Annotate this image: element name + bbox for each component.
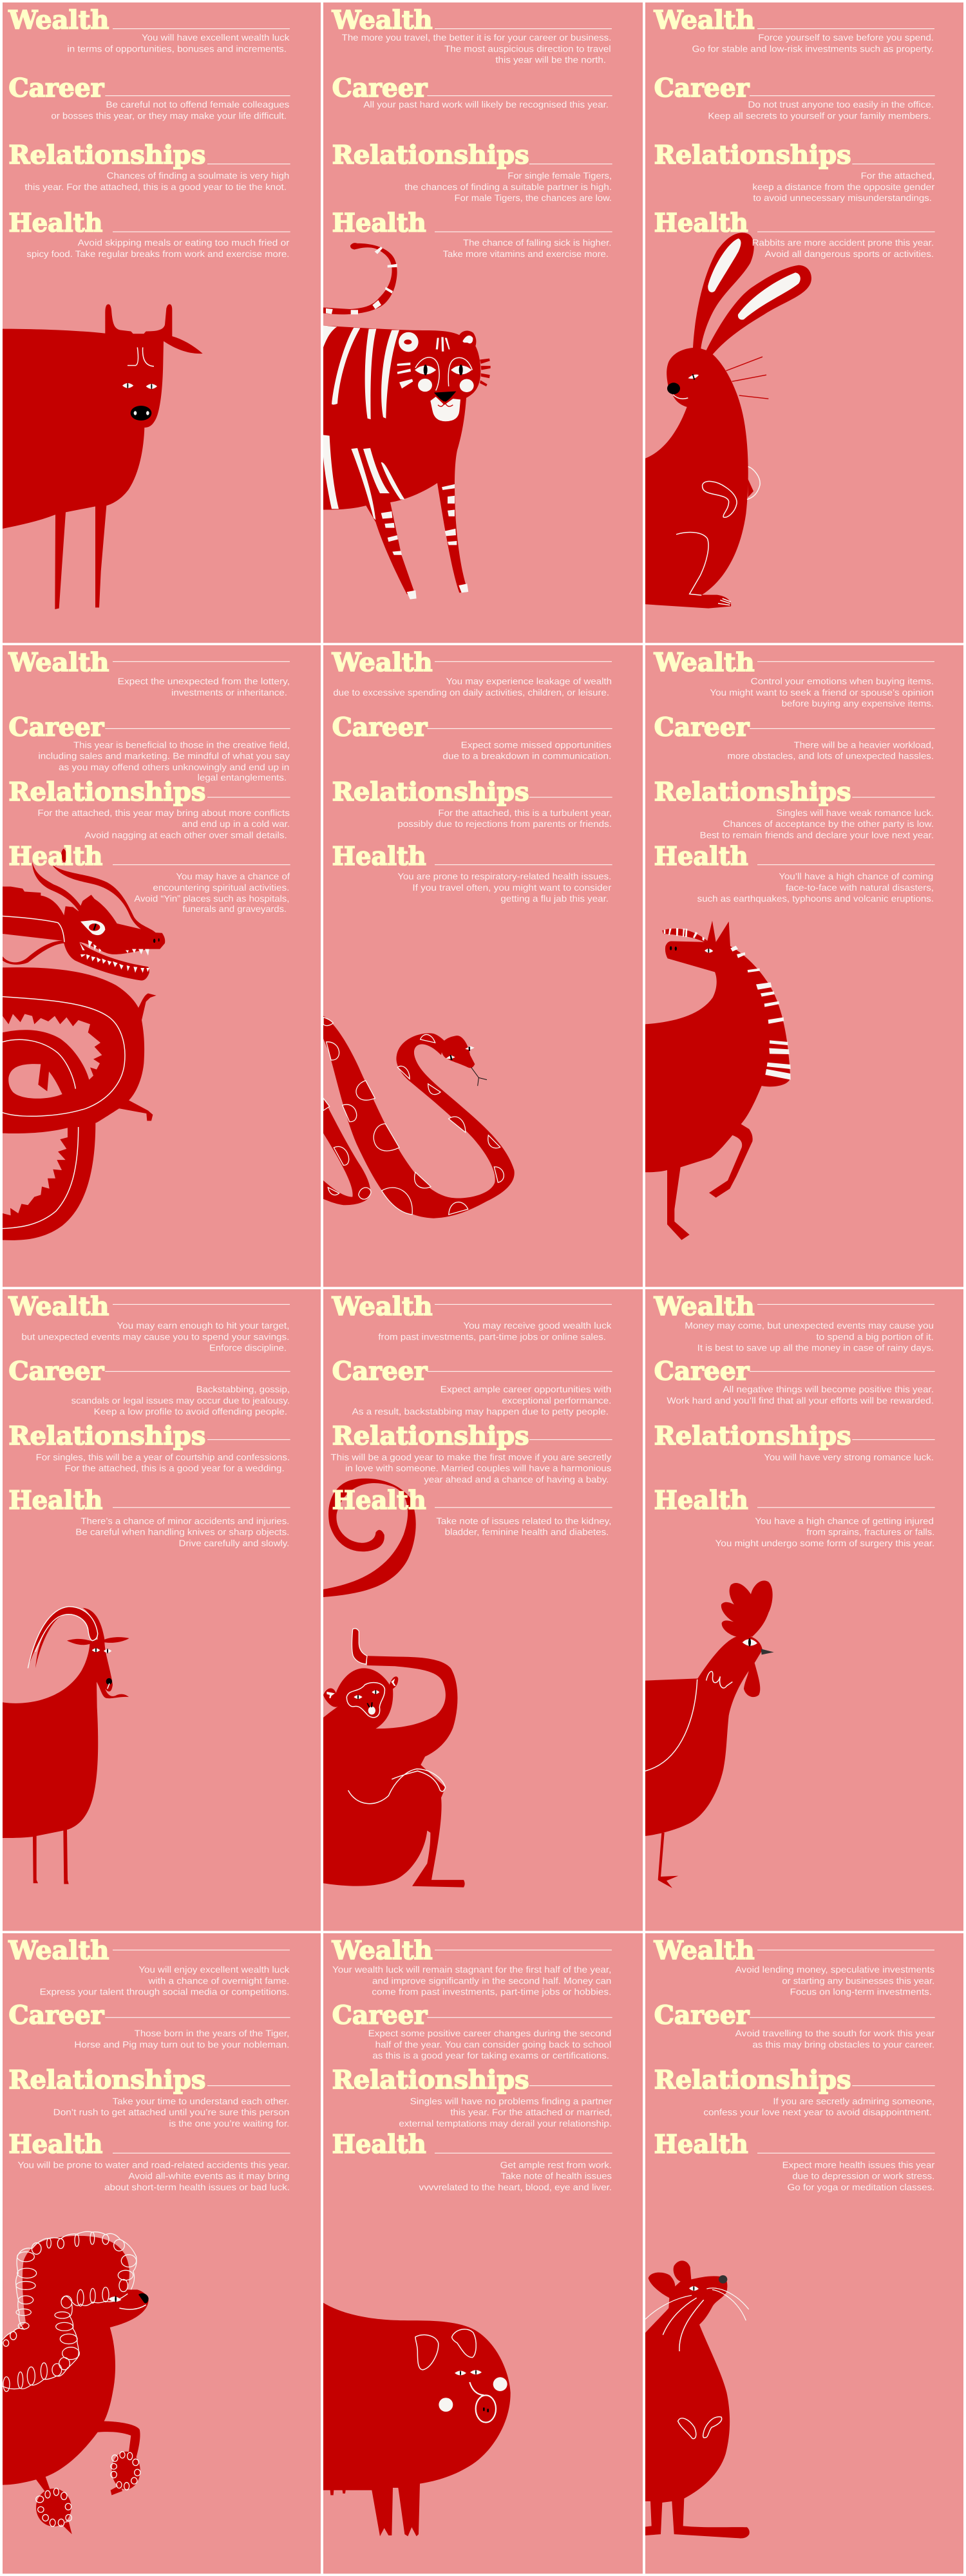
text: Health forecast: face-to-face with natural disasters,: [786, 882, 934, 893]
text: Health forecast: [443, 238, 611, 259]
heading: Health: Health: [8, 2129, 102, 2159]
icon: rat illustration: [645, 2260, 750, 2538]
text: Wealth forecast: [685, 1320, 934, 1353]
text: Health forecast: Drive carefully and slowly.: [179, 1538, 289, 1548]
text: Health forecast: [782, 2160, 934, 2192]
text: Health forecast: encountering spiritual activities.: [153, 882, 289, 893]
text: Wealth forecast: You may earn enough to hit your target,: [117, 1320, 289, 1331]
text: Health forecast: Go for yoga or meditation classes.: [788, 2182, 934, 2192]
text: Career forecast: Those born in the years of the Tiger,: [135, 2028, 289, 2038]
text: Health forecast: such as earthquakes, typhoons and volcanic eruptions.: [697, 893, 934, 904]
text: Health forecast: [715, 1516, 934, 1548]
text: Health forecast: Avoid all-white events as it may bring: [128, 2171, 289, 2181]
heading: Health: Health: [654, 1485, 748, 1515]
text: Career forecast: [727, 740, 934, 761]
text: Wealth forecast: but unexpected events may cause you to spend your savings.: [21, 1332, 289, 1342]
heading: Wealth: Wealth: [332, 1935, 433, 1965]
text: Career forecast: [442, 740, 611, 761]
text: Wealth forecast: Go for stable and low-risk investments such as property.: [692, 44, 934, 54]
heading: Wealth: Wealth: [332, 5, 433, 35]
text: Relationships forecast: For singles, this will be a year of courtship and confessions.: [36, 1452, 290, 1463]
text: Health forecast: Avoid all dangerous sports or activities.: [765, 249, 934, 259]
text: Relationships forecast: If you are secretly admiring someone,: [773, 2096, 934, 2107]
heading: Wealth: Wealth: [332, 647, 433, 677]
heading: Wealth: Wealth: [8, 647, 109, 677]
heading: Health: Health: [654, 841, 748, 871]
heading: Career: Career: [332, 712, 428, 742]
text: Career forecast: [667, 1384, 934, 1406]
text: Relationships forecast: Don’t rush to get attached until you’re sure this person: [53, 2107, 289, 2117]
heading: Career: Career: [654, 1356, 750, 1386]
text: Relationships forecast: [397, 808, 612, 829]
text: Health forecast: You may have a chance of: [176, 871, 290, 882]
text: Wealth forecast: Money may come, but unexpected events may cause you: [685, 1320, 934, 1331]
text: Health forecast: Avoid skipping meals or eating too much fried or: [78, 238, 289, 248]
text: Relationships forecast: Take your time to understand each other.: [113, 2096, 289, 2107]
text: Career forecast: Be careful not to offend female colleagues: [106, 99, 289, 109]
heading: Health: Health: [8, 1485, 102, 1515]
text: Relationships forecast: [404, 171, 612, 203]
text: Career forecast: [51, 99, 289, 121]
text: Career forecast: legal entanglements.: [198, 772, 287, 782]
heading: Health: Health: [8, 207, 102, 238]
text: Wealth forecast: It is best to save up all the money in case of rainy days.: [697, 1343, 934, 1353]
text: Wealth forecast: with a chance of overnight fame.: [148, 1976, 289, 1986]
text: Health forecast: spicy food. Take regular breaks from work and exercise more.: [26, 249, 289, 259]
text: Relationships forecast: the chances of finding a suitable partner is high.: [404, 182, 612, 192]
text: Relationships forecast: [37, 808, 290, 840]
text: Relationships forecast: [399, 2096, 612, 2128]
text: Career forecast: exceptional performance.: [502, 1396, 611, 1406]
text: Relationships forecast: For single female Tigers,: [507, 171, 612, 181]
panel: goat: [3, 1289, 321, 1931]
heading: Health: Health: [332, 1485, 426, 1515]
text: Career forecast: Expect some missed opportunities: [461, 740, 611, 750]
text: Career forecast: Avoid travelling to the south for work this year: [735, 2028, 934, 2038]
text: Wealth forecast: [21, 1320, 289, 1353]
text: Wealth forecast: You might want to seek a friend or spouse’s opinion: [710, 687, 934, 697]
text: Health forecast: The chance of falling sick is higher.: [463, 238, 611, 248]
heading: Relationships: Relationships: [332, 777, 529, 807]
text: Health forecast: You’ll have a high chance of coming: [779, 871, 933, 882]
panel: horse: [645, 645, 963, 1287]
text: Career forecast: Keep all secrets to yourself or your family members.: [708, 111, 931, 121]
text: Wealth forecast: [67, 32, 290, 54]
text: Wealth forecast: from past investments, part-time jobs or online sales.: [378, 1332, 606, 1342]
text: Relationships forecast: For the attached, this is a turbulent year,: [438, 808, 612, 818]
text: Career forecast: Backstabbing, gossip,: [196, 1384, 290, 1394]
text: Wealth forecast: Avoid lending money, speculative investments: [735, 1964, 934, 1975]
text: Wealth forecast: You may experience leakage of wealth: [446, 676, 612, 687]
text: Relationships forecast: Chances of finding a soulmate is very high: [107, 171, 289, 181]
text: Career forecast: Keep a low profile to avoid offending people.: [94, 1406, 287, 1417]
text: Relationships forecast: Singles will have no problems finding a partner: [410, 2096, 612, 2107]
text: Relationships forecast: is the one you’re waiting for.: [169, 2118, 289, 2128]
icon: goat illustration: [3, 1607, 129, 1884]
text: Career forecast: [735, 2028, 934, 2050]
heading: Relationships: Relationships: [654, 1421, 851, 1451]
text: Health forecast: Expect more health issues this year: [782, 2160, 934, 2170]
text: Health forecast: getting a flu jab this year.: [500, 893, 609, 904]
text: Relationships forecast: For male Tigers, the chances are low.: [455, 193, 612, 203]
text: Wealth forecast: Expect the unexpected from the lottery,: [118, 676, 290, 687]
text: Relationships forecast: [700, 808, 934, 840]
text: Wealth forecast: Enforce discipline.: [209, 1343, 287, 1353]
text: Career forecast: half of the year. You can consider going back to school: [375, 2040, 611, 2050]
text: Wealth forecast: The most auspicious direction to travel: [444, 44, 611, 54]
text: Health forecast: funerals and graveyards.: [182, 904, 287, 914]
icon: ox illustration: [3, 304, 203, 609]
text: Career forecast: [368, 2028, 611, 2061]
text: Health forecast: [75, 1516, 289, 1548]
panel: dragon: [3, 645, 321, 1287]
text: Wealth forecast: [333, 676, 612, 697]
text: Wealth forecast: You may receive good wealth luck: [463, 1320, 612, 1331]
heading: Relationships: Relationships: [8, 2065, 205, 2095]
text: Health forecast: Get ample rest from work.: [500, 2160, 612, 2170]
text: Career forecast: [352, 1384, 611, 1417]
text: Wealth forecast: in terms of opportunities, bonuses and increments.: [67, 44, 287, 54]
text: Career forecast: scandals or legal issues may occur due to jealousy.: [71, 1396, 290, 1406]
text: Wealth forecast: [332, 1964, 611, 1997]
text: Career forecast: [71, 1384, 290, 1417]
text: Career forecast: [38, 740, 290, 782]
text: Relationships forecast: to avoid unnecessary misunderstandings.: [753, 193, 932, 203]
heading: Career: Career: [332, 2000, 428, 2030]
text: Career forecast: due to a breakdown in communication.: [442, 751, 611, 761]
panel: dog: [3, 1933, 321, 2573]
heading: Career: Career: [654, 2000, 750, 2030]
text: Health forecast: [752, 238, 934, 259]
text: Career forecast: as you may offend others unknowingly and end up in: [59, 762, 289, 772]
text: Wealth forecast: and improve significantly in the second half. Money can: [372, 1976, 611, 1986]
heading: Health: Health: [8, 841, 102, 871]
text: Career forecast: [74, 2028, 289, 2050]
icon: snake illustration: [323, 1016, 515, 1218]
text: Wealth forecast: investments or inheritance.: [171, 687, 287, 697]
text: Relationships forecast: For the attached, this year may bring about more conflicts: [37, 808, 290, 818]
heading: Relationships: Relationships: [332, 1421, 529, 1451]
text: Career forecast: [708, 99, 934, 121]
text: Relationships forecast: [24, 171, 289, 192]
text: Relationships forecast: year ahead and a chance of having a baby.: [424, 1474, 609, 1484]
heading: Career: Career: [332, 73, 428, 103]
text: Health forecast: You will be prone to water and road-related accidents this year.: [17, 2160, 290, 2170]
heading: Health: Health: [332, 207, 426, 238]
text: Relationships forecast: Singles will have weak romance luck.: [776, 808, 934, 818]
heading: Health: Health: [654, 2129, 748, 2159]
text: Career forecast: This year is beneficial to those in the creative field,: [73, 740, 290, 750]
icon: dragon illustration: [3, 849, 165, 1240]
heading: Wealth: Wealth: [8, 1291, 109, 1321]
text: Wealth forecast: Your wealth luck will remain stagnant for the first half of the year,: [332, 1964, 611, 1975]
panel: monkey: [323, 1289, 643, 1931]
text: Wealth forecast: You will enjoy excellent wealth luck: [138, 1964, 290, 1975]
heading: Career: Career: [8, 1356, 104, 1386]
text: Relationships forecast: keep a distance from the opposite gender: [752, 182, 934, 192]
text: Wealth forecast: before buying any expensive items.: [782, 698, 934, 708]
text: Wealth forecast: Focus on long-term investments.: [790, 1987, 932, 1997]
text: Health forecast: [697, 871, 934, 904]
text: Career forecast: There will be a heavier workload,: [794, 740, 934, 750]
text: Relationships forecast: For the attached, this is a good year for a wedding.: [65, 1463, 285, 1473]
text: Career forecast: As a result, backstabbing may happen due to petty people.: [352, 1406, 609, 1417]
heading: Career: Career: [8, 73, 104, 103]
panel: pig: [323, 1933, 643, 2573]
heading: Relationships: Relationships: [8, 1421, 205, 1451]
heading: Wealth: Wealth: [654, 5, 755, 35]
text: Relationships forecast: possibly due to rejections from parents or friends.: [397, 819, 612, 829]
text: Health forecast: Be careful when handling knives or sharp objects.: [75, 1527, 289, 1537]
heading: Career: Career: [8, 712, 104, 742]
heading: Wealth: Wealth: [654, 1291, 755, 1321]
text: Wealth forecast: [710, 676, 934, 708]
text: Career forecast: All your past hard work will likely be recognised this year.: [363, 99, 609, 109]
text: Health forecast: [397, 871, 611, 904]
icon: poodle illustration: [3, 2231, 149, 2534]
icon: rabbit illustration: [645, 232, 811, 609]
text: Wealth forecast: [378, 1320, 612, 1342]
heading: Relationships: Relationships: [8, 140, 205, 170]
heading: Career: Career: [654, 73, 750, 103]
text: Health forecast: You have a high chance of getting injured: [755, 1516, 934, 1526]
text: Wealth forecast: [118, 676, 290, 697]
text: Relationships forecast: this year. For the attached or married,: [450, 2107, 612, 2117]
heading: Relationships: Relationships: [654, 777, 851, 807]
text: Career forecast: Expect some positive career changes during the second: [368, 2028, 611, 2038]
text: Relationships forecast: Avoid nagging at each other over small details.: [85, 830, 287, 840]
text: Relationships forecast: this year. For the attached, this is a good year to tie the knot.: [24, 182, 287, 192]
heading: Relationships: Relationships: [654, 2065, 851, 2095]
heading: Wealth: Wealth: [332, 1291, 433, 1321]
text: Wealth forecast: [735, 1964, 934, 1997]
heading: Wealth: Wealth: [8, 5, 109, 35]
text: Relationships forecast: [53, 2096, 289, 2128]
heading: Career: Career: [654, 712, 750, 742]
text: Career forecast: more obstacles, and lots of unexpected hassles.: [727, 751, 934, 761]
text: Wealth forecast: Force yourself to save before you spend.: [758, 32, 934, 43]
heading: Health: Health: [654, 207, 748, 238]
text: Health forecast: [134, 871, 290, 914]
text: Wealth forecast: [692, 32, 934, 54]
text: Health forecast: [26, 238, 289, 259]
text: Relationships forecast: and end up in a cold war.: [182, 819, 290, 829]
panel: snake: [323, 645, 643, 1287]
text: Health forecast: about short-term health issues or bad luck.: [104, 2182, 290, 2192]
text: Relationships forecast: [703, 2096, 934, 2117]
text: Health forecast: You might undergo some form of surgery this year.: [715, 1538, 934, 1548]
text: Health forecast: bladder, feminine health and diabetes.: [445, 1527, 609, 1537]
text: Health forecast: [419, 2160, 612, 2192]
text: Career forecast: as this is a good year for taking exams or certifications.: [372, 2050, 609, 2061]
icon: monkey illustration: [323, 1479, 465, 1888]
text: Career forecast: Work hard and you’ll find that all your efforts will be rewarded.: [667, 1396, 934, 1406]
text: Relationships forecast: [330, 1452, 611, 1484]
text: Wealth forecast: Control your emotions when buying items.: [751, 676, 934, 687]
icon: horse illustration: [645, 921, 791, 1240]
text: Wealth forecast: [342, 32, 611, 65]
text: Career forecast: including sales and marketing. Be mindful of what you say: [38, 751, 290, 761]
text: Relationships forecast: For the attached,: [861, 171, 934, 181]
panel: rat: [645, 1933, 963, 2573]
heading: Wealth: Wealth: [654, 1935, 755, 1965]
text: Health forecast: Take more vitamins and exercise more.: [443, 249, 609, 259]
text: Career forecast: as this may bring obstacles to your career.: [752, 2040, 934, 2050]
text: Health forecast: You are prone to respiratory-related health issues.: [397, 871, 611, 882]
text: Relationships forecast: confess your love next year to avoid disappointment.: [703, 2107, 932, 2117]
heading: Relationships: Relationships: [332, 2065, 529, 2095]
heading: Career: Career: [332, 1356, 428, 1386]
text: Health forecast: Avoid “Yin” places such as hospitals,: [134, 893, 289, 904]
text: Health forecast: There’s a chance of minor accidents and injuries.: [80, 1516, 289, 1526]
text: Health forecast: [17, 2160, 290, 2192]
text: Wealth forecast: or starting any businesses this year.: [782, 1976, 934, 1986]
text: Wealth forecast: to spend a big portion of it.: [816, 1332, 934, 1342]
heading: Career: Career: [8, 2000, 104, 2030]
text: Health forecast: from sprains, fractures or falls.: [806, 1527, 934, 1537]
heading: Health: Health: [332, 2129, 426, 2159]
icon: tiger illustration: [323, 243, 491, 600]
text: Career forecast: All negative things will become positive this year.: [723, 1384, 934, 1394]
text: Health forecast: vvvvrelated to the heart, blood, eye and liver.: [419, 2182, 612, 2192]
text: Relationships forecast: Chances of acceptance by the other party is low.: [723, 819, 934, 829]
text: Wealth forecast: this year will be the north.: [495, 55, 606, 65]
text: Health forecast: due to depression or work stress.: [792, 2171, 934, 2181]
heading: Wealth: Wealth: [8, 1935, 109, 1965]
text: Relationships forecast: in love with someone. Married couples will have a harmonious: [345, 1463, 611, 1473]
text: Relationships forecast: Best to remain friends and declare your love next year.: [700, 830, 934, 840]
text: Health forecast: [436, 1516, 611, 1537]
icon: pig illustration: [323, 2303, 511, 2536]
heading: Relationships: Relationships: [332, 140, 529, 170]
text: Career forecast: or bosses this year, or they may make your life difficult.: [51, 111, 287, 121]
text: Health forecast: Rabbits are more accident prone this year.: [752, 238, 934, 248]
text: Relationships forecast: You will have very strong romance luck.: [764, 1452, 934, 1463]
panel: tiger: [323, 3, 643, 643]
heading: Relationships: Relationships: [654, 140, 851, 170]
heading: Wealth: Wealth: [654, 647, 755, 677]
text: Health forecast: Take note of health issues: [501, 2171, 612, 2181]
text: Career forecast: Horse and Pig may turn out to be your nobleman.: [74, 2040, 289, 2050]
text: Wealth forecast: [40, 1964, 290, 1997]
panel: rooster: [645, 1289, 963, 1931]
text: Wealth forecast: due to excessive spending on daily activities, children, or leisure.: [333, 687, 609, 697]
heading: Relationships: Relationships: [8, 777, 205, 807]
text: Relationships forecast: external temptations may derail your relationship.: [399, 2118, 612, 2128]
text: Relationships forecast: This will be a good year to make the first move if you are secretly: [330, 1452, 611, 1463]
text: Relationships forecast: [752, 171, 934, 203]
icon: rooster illustration: [645, 1580, 774, 1888]
text: Career forecast: Do not trust anyone too easily in the office.: [748, 99, 934, 109]
text: Wealth forecast: come from past investments, part-time jobs or hobbies.: [372, 1987, 611, 1997]
text: Wealth forecast: You will have excellent wealth luck: [142, 32, 290, 43]
text: Relationships forecast: [36, 1452, 290, 1473]
panel: rabbit: [645, 3, 963, 643]
heading: Health: Health: [332, 841, 426, 871]
text: Health forecast: If you travel often, you might want to consider: [412, 882, 611, 893]
text: Career forecast: Expect ample career opportunities with: [440, 1384, 611, 1394]
text: Wealth forecast: The more you travel, the better it is for your career or business.: [342, 32, 611, 43]
text: Wealth forecast: Express your talent through social media or competitions.: [40, 1987, 289, 1997]
text: Health forecast: Take note of issues related to the kidney,: [436, 1516, 611, 1526]
panel: ox: [3, 3, 321, 643]
